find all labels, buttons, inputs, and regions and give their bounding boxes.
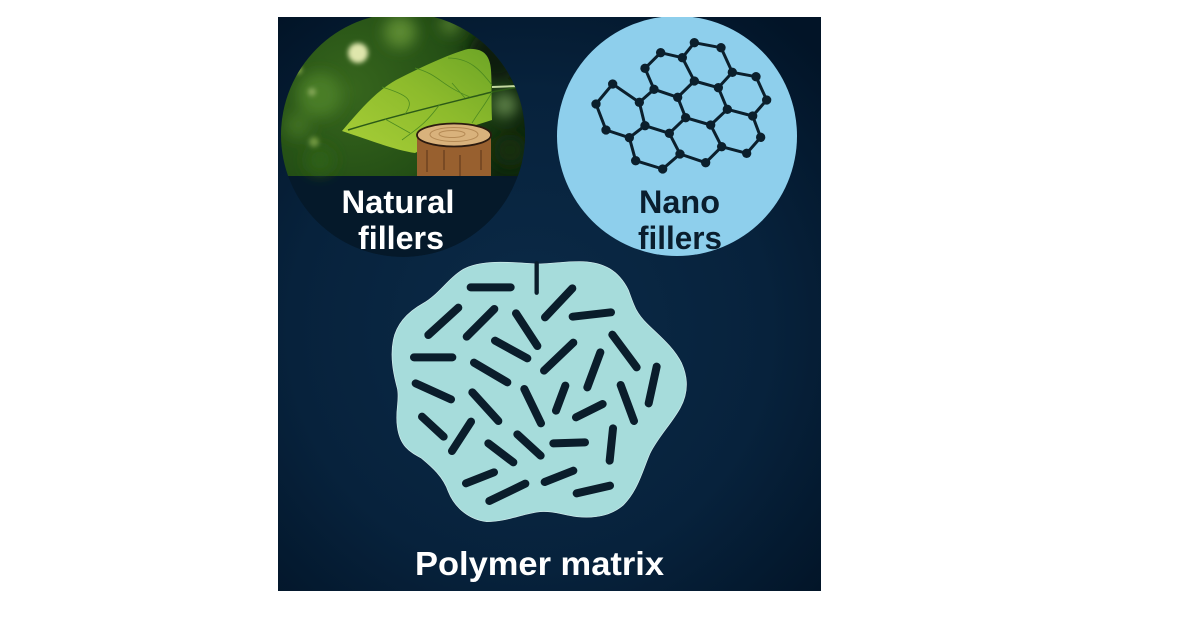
nano fillers badge (557, 16, 797, 256)
natural fillers badge (278, 13, 528, 257)
label: Natural fillers: Natural (342, 184, 454, 220)
panel: nano fillers circle (557, 16, 797, 256)
panel: natural fillers circle (278, 13, 528, 257)
label: Nano fillers: Nano (639, 184, 720, 220)
forest photo background (278, 13, 528, 176)
icon: wood stump (417, 124, 491, 176)
fibres (414, 263, 657, 501)
infographic canvas (278, 17, 821, 591)
label: Polymer matrix: Polymer matrix (415, 545, 665, 582)
chart: polymer matrix blob with dispersed fibres (392, 262, 686, 522)
label: Nano fillers: fillers (638, 220, 722, 256)
icon: graphene lattice (591, 38, 771, 174)
matrix blob (392, 262, 686, 522)
icon: leaf (342, 49, 518, 153)
label: Natural fillers: fillers (358, 220, 444, 256)
label: Nano fillers (638, 190, 721, 250)
label: Natural fillers (344, 190, 452, 250)
panel: dark background (278, 17, 821, 591)
